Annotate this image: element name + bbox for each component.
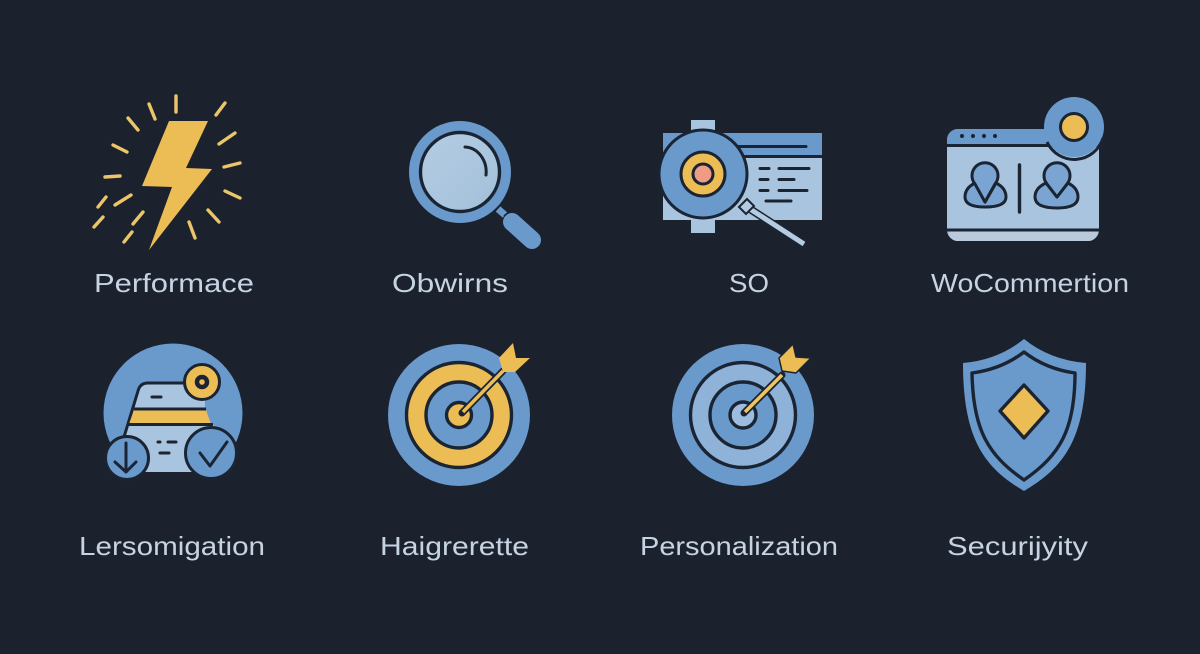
label: Performace: Performace (94, 268, 254, 298)
icon: shield (963, 339, 1086, 491)
label: SO: SO (729, 268, 769, 298)
label: WoCommertion: WoCommertion (931, 268, 1129, 298)
icon: lightning bolt (94, 96, 240, 250)
icon: browser with users (947, 97, 1104, 241)
panel: securijyity (947, 339, 1088, 561)
panel: performance (94, 96, 254, 298)
icon: magnifying glass (409, 121, 532, 240)
panel: wocommertion (931, 97, 1129, 298)
label: Securijyity: Securijyity (947, 531, 1088, 561)
panel: obwirns (392, 121, 532, 298)
label: Obwirns: Obwirns (392, 268, 508, 298)
panel: personalization (640, 344, 838, 561)
panel: SO (659, 120, 822, 298)
label: Lersomigation: Lersomigation (79, 531, 265, 561)
icon: blue target with arrow (672, 344, 814, 486)
icon: yellow target with arrow (388, 343, 530, 486)
icon: drive with badges (104, 344, 242, 482)
icon: seo browser and lens (659, 120, 822, 244)
label: Haigrerette: Haigrerette (380, 531, 529, 561)
panel: lersomigation (79, 344, 265, 561)
panel: haigrerette (380, 343, 530, 561)
label: Personalization: Personalization (640, 531, 838, 561)
